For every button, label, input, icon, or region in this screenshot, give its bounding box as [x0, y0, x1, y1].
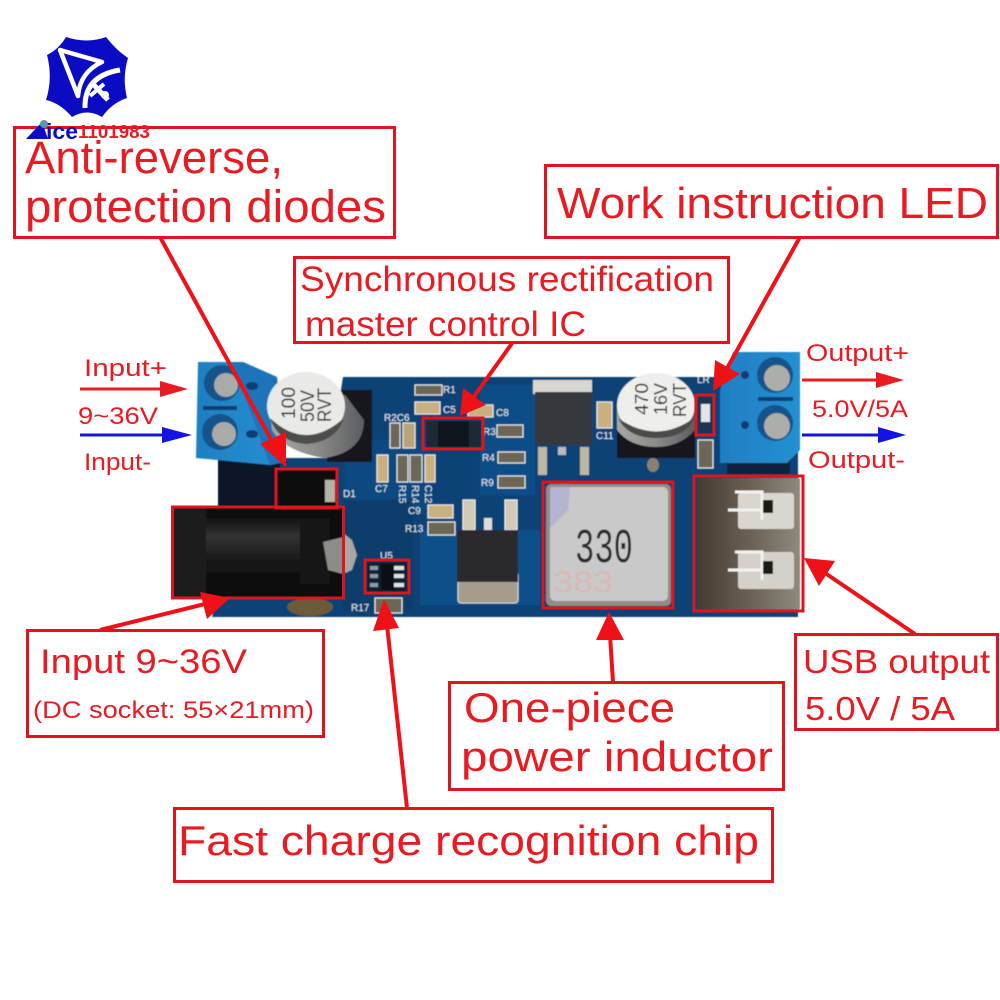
silkscreen labels: C12	[422, 485, 433, 504]
callout: fast charge chip: Fast charge recognition chip	[178, 817, 759, 864]
silkscreen labels: R17	[351, 603, 370, 614]
input labels and arrows	[78, 355, 192, 476]
silkscreen labels: R14	[409, 485, 420, 504]
master control IC	[426, 421, 481, 447]
logo	[46, 37, 128, 117]
input capacitor 100uF: RVT	[315, 388, 336, 422]
output capacitor 470uF: RVT	[670, 383, 690, 417]
output labels and arrows: Output+	[806, 340, 909, 367]
arrow: to inductor	[596, 612, 624, 682]
callout: work LED: Work instruction LED	[557, 179, 988, 228]
red highlight boxes	[172, 395, 803, 611]
input labels and arrows: 9~36V	[78, 403, 158, 430]
input labels and arrows: Input+	[84, 355, 167, 382]
output labels and arrows: Output-	[808, 447, 905, 474]
board pcb	[212, 377, 798, 617]
logo wordmark	[26, 119, 150, 144]
charge recognition chip U5	[367, 562, 407, 592]
output labels and arrows	[802, 340, 909, 474]
input capacitor 100uF: 50V	[298, 390, 319, 422]
silkscreen labels: R15	[396, 485, 407, 504]
arrow: to charge chip	[373, 599, 407, 808]
callout: power inductor	[450, 682, 784, 790]
input terminal block	[196, 362, 285, 465]
callout: fast charge chip	[174, 808, 772, 882]
output capacitor 470uF: 16V	[651, 383, 671, 415]
callout: synchronous rectification IC	[294, 258, 728, 344]
callout: synchronous rectification IC: Synchronous rectification	[300, 260, 714, 299]
callout: power inductor: power inductor	[461, 733, 773, 780]
silkscreen labels: R9	[481, 478, 494, 489]
callout: input 9-36V	[28, 630, 324, 736]
silkscreen labels: R13	[405, 524, 424, 535]
lower MOSFET	[457, 500, 518, 603]
USB port	[697, 478, 800, 610]
SMD components and labels	[375, 385, 713, 613]
callout: input 9-36V: (DC socket: 55×21mm)	[33, 697, 314, 724]
output labels and arrows: 5.0V/5A	[812, 396, 908, 423]
callout: synchronous rectification IC: master control IC	[305, 305, 586, 344]
silkscreen labels: C9	[408, 506, 421, 517]
callout: anti-reverse diodes	[14, 128, 394, 238]
arrow: to DC jack	[100, 592, 230, 630]
input capacitor 100uF	[267, 372, 372, 462]
diode D1: D1	[343, 489, 356, 500]
silkscreen labels: R1	[443, 385, 456, 396]
callout: anti-reverse diodes: protection diodes	[25, 181, 386, 232]
work LED	[698, 397, 712, 433]
callout: power inductor: One-piece	[464, 684, 675, 731]
arrow: to diode	[160, 237, 286, 467]
input labels and arrows: Input-	[84, 449, 151, 476]
panel: circuit board photo	[172, 352, 800, 617]
power inductor	[546, 484, 671, 606]
logo shield	[46, 37, 128, 117]
silkscreen labels: C8	[496, 408, 509, 419]
upper MOSFET Q1	[533, 380, 592, 475]
callout: USB output: 5.0V / 5A	[805, 690, 955, 727]
silkscreen labels: C5	[443, 405, 456, 416]
diode D1	[277, 470, 356, 507]
output terminal block	[720, 352, 800, 474]
callout: USB output	[796, 634, 998, 730]
logo wordmark: 1101983	[78, 122, 150, 142]
silkscreen labels: R4	[482, 453, 495, 464]
silkscreen labels: R3	[483, 427, 496, 438]
callout: anti-reverse diodes: Anti-reverse,	[25, 132, 283, 183]
callout: USB output: USB output	[803, 643, 990, 680]
pcb shading	[218, 385, 540, 610]
logo wordmark: ice	[46, 119, 78, 144]
silkscreen labels: LR	[697, 375, 710, 386]
silkscreen labels	[351, 375, 710, 614]
arrow: to LED	[713, 237, 800, 391]
logo mark	[60, 50, 120, 108]
DC jack	[172, 507, 357, 616]
power inductor: 383	[553, 566, 613, 599]
input capacitor 100uF: 100	[279, 387, 300, 419]
silkscreen labels: R2C6	[384, 413, 410, 424]
arrow: to IC	[460, 342, 513, 416]
arrow: to USB	[804, 558, 915, 634]
output capacitor 470uF: 470	[632, 383, 652, 415]
silkscreen labels: U5	[380, 551, 393, 562]
silkscreen labels: C11	[596, 431, 614, 442]
output capacitor 470uF	[617, 373, 695, 472]
callout: input 9-36V: Input 9~36V	[40, 643, 247, 681]
power inductor: 330	[575, 523, 633, 577]
callout: work LED	[546, 166, 998, 238]
silkscreen labels: C7	[375, 484, 388, 495]
